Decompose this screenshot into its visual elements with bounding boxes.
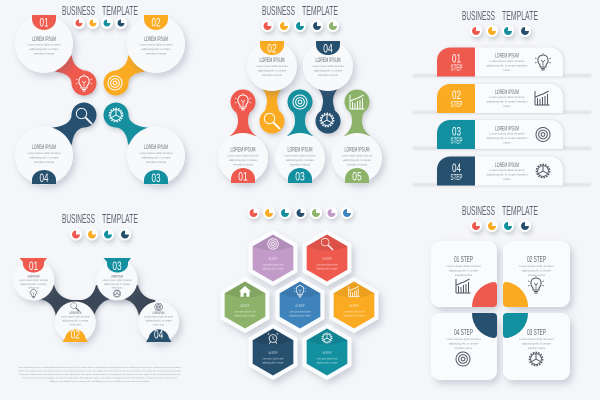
step 04 circle <box>138 302 179 342</box>
card 02: interdum luctus <box>528 273 545 277</box>
panel: four square cards <box>431 204 570 380</box>
step 04 circle: 04 <box>154 328 163 342</box>
step 02 circle: adipiscing elit, in ornare <box>62 318 89 322</box>
step 05 circle <box>332 133 382 184</box>
colour legend dots <box>70 228 131 240</box>
card 03 <box>503 313 570 380</box>
icon: magnifier <box>76 108 92 124</box>
step 03 circle: LOREM IPSUM <box>288 148 312 154</box>
green connector <box>344 89 370 136</box>
hexagon: purple 06: Lorem ipsum dolor sit amet <box>262 262 284 266</box>
step 04 circle: Lorem ipsum dolor sit amet <box>28 151 61 155</box>
footer paragraph: Nullam ornare aliquet mauris, in volutpat lorem posuere sed. Curabitur interdum luctus nunc, quis sagittis nibh iaculis at. Donec mollis sem at nisi facilisis, vitae tristique odio varius. Maecenas finibus diam. <box>18 370 182 372</box>
step 04 circle: 04 <box>40 171 49 185</box>
card 02 <box>503 241 570 307</box>
step 05 circle: Lorem ipsum dolor sit amet <box>342 154 373 158</box>
step 04 circle: adipiscing elit, in ornare <box>314 68 342 72</box>
hexagon: green 05: Lorem ipsum dolor sit amet <box>234 310 256 314</box>
title: TEMPLATE <box>102 212 138 226</box>
panel: zigzag circles <box>13 212 182 383</box>
colour legend dots <box>470 25 531 37</box>
icon: target <box>108 76 122 90</box>
step 04 circle: adipiscing elit, in ornare <box>146 318 172 322</box>
step 02 circle: LOREM IPSUM <box>144 37 168 43</box>
row 03: 03 <box>452 124 461 138</box>
row 02: luctus <box>504 104 511 108</box>
step 03 circle: adipiscing elit, in ornare <box>104 282 130 286</box>
hexagon: purple 06: adipiscing elit, in ornare <box>262 266 284 270</box>
panel: hexagons <box>222 207 377 378</box>
row 04: luctus <box>504 177 511 181</box>
hexagon: navy 04: Lorem ipsum dolor sit amet <box>262 356 284 360</box>
step 03 circle: interdum luctus <box>290 162 310 166</box>
step 05 circle: adipiscing elit, in ornare <box>343 158 371 162</box>
hexagon: red 01: adipiscing elit, in ornare <box>316 266 338 270</box>
step 03 circle: 03 <box>295 170 305 184</box>
step 04 circle: LOREM IPSUM <box>32 145 56 151</box>
panel: step rows <box>413 9 591 186</box>
step 01 circle <box>13 258 54 300</box>
step 04 circle <box>15 126 73 185</box>
step 04 circle: LOREM IPSUM <box>153 311 165 315</box>
panel: four circles cross <box>15 4 185 185</box>
step 03 circle: adipiscing elit, in ornare <box>286 158 314 162</box>
step 02 circle: 02 <box>267 42 277 56</box>
orange connector <box>104 55 145 96</box>
hexagon: blue 07: adipiscing elit, in ornare <box>290 314 311 318</box>
step 03 circle: LOREM IPSUM <box>144 145 168 151</box>
quarter: red <box>472 282 497 307</box>
hexagon: blue 07 <box>277 278 323 332</box>
card 01: 01 STEP <box>454 255 473 264</box>
step 01 circle <box>15 15 73 73</box>
red connector <box>55 55 96 96</box>
quarter: teal <box>503 313 528 338</box>
step 04 circle: interdum luctus <box>153 322 164 326</box>
row 01: luctus <box>504 68 511 72</box>
row 01 <box>413 47 591 76</box>
red connector <box>230 89 256 136</box>
step 01 circle <box>218 133 268 184</box>
colour legend dots <box>262 20 339 32</box>
step 03 circle: adipiscing elit, in ornare <box>142 156 171 160</box>
icon: bulb <box>235 93 251 110</box>
step 02 circle <box>127 15 185 73</box>
hexagon: orange 02: Lorem ipsum dolor sit amet <box>344 310 365 314</box>
step 03 circle: Lorem ipsum dolor sit amet <box>140 151 173 155</box>
quarter: orange <box>503 282 528 307</box>
card 01 <box>431 241 497 307</box>
colour legend dots <box>73 17 127 29</box>
title: TEMPLATE <box>502 9 538 23</box>
step 02 circle: Lorem ipsum dolor sit amet <box>140 42 173 46</box>
step 02 circle: adipiscing elit, in ornare <box>258 68 286 72</box>
step 02 circle: 02 <box>152 16 161 30</box>
hexagon: green 05: 05 STEP <box>240 304 250 308</box>
title: BUSINESS <box>462 9 495 23</box>
title: BUSINESS <box>462 204 495 218</box>
step 01 circle: LOREM IPSUM <box>28 274 40 278</box>
step 03 circle: Lorem ipsum dolor sit amet <box>102 278 132 282</box>
card 01: interdum luctus <box>455 273 472 277</box>
step 03 circle: 03 <box>152 171 161 185</box>
card 03: Lorem ipsum dolor sit amet <box>520 337 554 341</box>
step 04 circle: interdum luctus <box>318 73 338 77</box>
row 01: adipiscing elit, in ornare interdum <box>486 64 528 68</box>
card 04: 04 STEP <box>454 328 473 337</box>
step 02 circle <box>55 302 96 342</box>
row 04: LOREM IPSUM <box>495 163 519 169</box>
row 02: Lorem ipsum dolor sit amet <box>490 95 525 99</box>
hexagon: orange 02 <box>331 278 377 332</box>
hexagon: teal 03: adipiscing elit, in ornare <box>316 360 338 364</box>
step 01 circle: adipiscing elit, in ornare <box>30 47 59 51</box>
card 03: interdum luctus <box>528 346 545 350</box>
teal connector <box>104 102 148 145</box>
row 02: STEP <box>450 99 463 109</box>
hexagon: teal 03 <box>304 326 350 378</box>
step 01 circle: Lorem ipsum dolor sit amet <box>28 42 61 46</box>
step 04 circle: 04 <box>323 42 333 56</box>
hexagon: navy 04: adipiscing elit, in ornare <box>262 360 284 364</box>
step 02 circle: LOREM IPSUM <box>69 311 81 315</box>
step 03 circle <box>127 126 185 185</box>
hexagon: teal 03: 03 STEP <box>322 351 332 355</box>
row 02: LOREM IPSUM <box>495 90 519 96</box>
card 02: 02 STEP <box>527 255 546 264</box>
step 03 circle: interdum luctus <box>146 160 166 164</box>
step 02 circle: Lorem ipsum dolor sit amet <box>61 314 90 318</box>
dark zigzag connector <box>33 285 158 320</box>
navy connector <box>315 85 341 134</box>
step 04 circle: LOREM IPSUM <box>316 58 340 64</box>
step 01 circle: LOREM IPSUM <box>32 37 56 43</box>
step 01 circle: interdum luctus <box>28 286 39 290</box>
step 02 circle: adipiscing elit, in ornare <box>142 47 171 51</box>
row 02 <box>413 84 591 113</box>
step 01 circle: Lorem ipsum dolor sit amet <box>19 278 48 282</box>
row 03 <box>413 120 591 149</box>
step 02 circle: interdum luctus <box>262 73 282 77</box>
hexagon: red 01 <box>304 232 350 284</box>
step 02 circle: 02 <box>71 328 80 342</box>
step 01 circle: LOREM IPSUM <box>230 148 256 154</box>
row 03: adipiscing elit, in ornare interdum <box>486 136 528 140</box>
footer paragraph <box>18 366 182 383</box>
step 05 circle: 05 <box>352 170 362 184</box>
step 01 circle: 01 <box>29 259 38 273</box>
step 05 circle: interdum luctus <box>347 162 367 166</box>
title: TEMPLATE <box>302 4 338 18</box>
hexagon: teal 03: Lorem ipsum dolor sit amet <box>316 356 338 360</box>
hexagon: purple 06: 06 STEP <box>268 257 278 261</box>
row 01: Lorem ipsum dolor sit amet <box>490 59 525 63</box>
card 02: Lorem ipsum dolor sit amet <box>520 264 554 268</box>
hexagon: orange 02: adipiscing elit, in ornare <box>344 314 365 318</box>
panel: five circles with necks <box>218 4 382 184</box>
step 03 circle: Lorem ipsum dolor sit amet <box>284 154 316 158</box>
title: TEMPLATE <box>102 4 138 18</box>
colour legend dots <box>248 207 353 219</box>
hexagon: orange 02: 02 STEP <box>350 304 359 308</box>
row 01: 01 <box>452 52 461 66</box>
navy connector <box>52 102 96 145</box>
step 02 circle: interdum luctus <box>146 52 166 56</box>
step 03 circle: interdum luctus <box>112 286 123 290</box>
step 03 circle <box>96 258 138 300</box>
title: BUSINESS <box>62 4 95 18</box>
step 05 circle: LOREM IPSUM <box>344 148 370 154</box>
card 03: 03 STEP <box>527 328 546 337</box>
orange connector <box>259 85 285 134</box>
footer paragraph: Aliquam erat volutpat. Duis at semper nibh, sed lobortis mi. Fusce convallis lacus in varius pretium tellus. <box>50 380 150 383</box>
row 04: adipiscing elit, in ornare interdum <box>486 172 528 176</box>
card 04: interdum luctus <box>455 346 472 350</box>
step 01 circle: 01 <box>40 16 49 30</box>
icon: target <box>293 95 307 109</box>
row 01: STEP <box>450 63 463 73</box>
hexagon: green 05 <box>222 278 268 332</box>
quarter: navy <box>472 313 497 338</box>
row 02: adipiscing elit, in ornare interdum <box>486 100 528 104</box>
icon: chart <box>350 95 364 109</box>
step 04 circle: adipiscing elit, in ornare <box>30 156 59 160</box>
title: BUSINESS <box>62 212 95 226</box>
step 01 circle: interdum luctus <box>233 162 253 166</box>
hexagon: green 05: adipiscing elit, in ornare <box>234 314 256 318</box>
hexagon: blue 07: Lorem ipsum dolor sit amet <box>290 310 311 314</box>
icon: gear <box>320 113 334 127</box>
step 04 circle: Lorem ipsum dolor sit amet <box>144 314 173 318</box>
step 03 circle: 03 <box>112 259 122 273</box>
footer paragraph: Lorem ipsum dolor sit amet, consectetur adipiscing elit. Nam vitae nibh nisl. Cras etitikis, sapien eu tincidunt dictum, orci magna aliquet ante, a dignissim ipsum dui vel nunc. Sed tempus enim et nisi vestibulum. <box>18 366 182 369</box>
row 03: Lorem ipsum dolor sit amet <box>490 132 525 136</box>
row 03: LOREM IPSUM <box>495 126 519 132</box>
icon: gear <box>109 108 123 122</box>
hexagon: red 01: 01 STEP <box>322 257 332 261</box>
card 04: Lorem ipsum dolor sit amet <box>446 337 481 341</box>
colour legend dots <box>470 220 531 232</box>
icon: magnifier <box>264 113 280 129</box>
row 03: STEP <box>450 136 463 146</box>
step 01 circle: interdum luctus <box>34 52 54 56</box>
step 01 circle: 01 <box>238 170 248 184</box>
hexagon: navy 04 <box>250 326 296 378</box>
icon: bulb <box>76 74 92 91</box>
card 01: adipiscing elit, in ornare <box>449 268 478 272</box>
step 02 circle: interdum luctus <box>70 322 81 326</box>
footer paragraph: Vivamus vehicula neque et dui aliquam, vitae placerat mauris tempor. Etiam dignissim turpis ac sem ultricies, et feugiat nisi suscipit. Proin sed lorem a erat faucibus interdum vitae sed justo. <box>22 376 178 380</box>
card 04 <box>431 313 497 380</box>
hexagon: blue 07: 07 STEP <box>296 304 305 308</box>
card 01: Lorem ipsum dolor sit amet <box>446 264 481 268</box>
teal connector <box>287 89 313 136</box>
step 03 circle <box>275 133 325 184</box>
step 02 circle <box>247 41 297 91</box>
card 04: adipiscing elit, in ornare <box>449 342 478 346</box>
hexagon: navy 04: 04 STEP <box>268 351 278 355</box>
step 03 circle: LOREM IPSUM <box>111 274 123 278</box>
row 03: luctus <box>504 140 511 144</box>
row 04: STEP <box>450 172 463 182</box>
step 01 circle: Lorem ipsum dolor sit amet <box>228 154 259 158</box>
step 02 circle: LOREM IPSUM <box>260 58 284 64</box>
row 04: Lorem ipsum dolor sit amet <box>490 168 525 172</box>
hexagon: red 01: Lorem ipsum dolor sit amet <box>316 262 338 266</box>
card 02: adipiscing elit, in ornare <box>522 268 551 272</box>
card 03: adipiscing elit, in ornare <box>522 342 551 346</box>
step 01 circle: adipiscing elit, in ornare <box>229 158 257 162</box>
step 04 circle: Lorem ipsum dolor sit amet <box>312 64 344 68</box>
title: BUSINESS <box>262 4 295 18</box>
row 04 <box>413 156 591 186</box>
row 01: LOREM IPSUM <box>495 54 519 60</box>
step 01 circle: adipiscing elit, in ornare <box>20 282 47 286</box>
step 02 circle: Lorem ipsum dolor sit amet <box>256 64 288 68</box>
footer paragraph: Pellentesque habitant morbi tristique senectus et netus et malesuada fames ac turpis egestas. Quisque sodales nisi vel augue porta, quis congue nunc posuere. Integer vel arcu ut justo fermentum ornare velit. <box>20 373 181 376</box>
title: TEMPLATE <box>502 204 538 218</box>
row 02: 02 <box>452 88 461 102</box>
step 04 circle <box>303 41 353 91</box>
hexagon: purple 06 <box>250 232 296 284</box>
row 04: 04 <box>452 161 461 175</box>
step 04 circle: interdum luctus <box>34 160 54 164</box>
